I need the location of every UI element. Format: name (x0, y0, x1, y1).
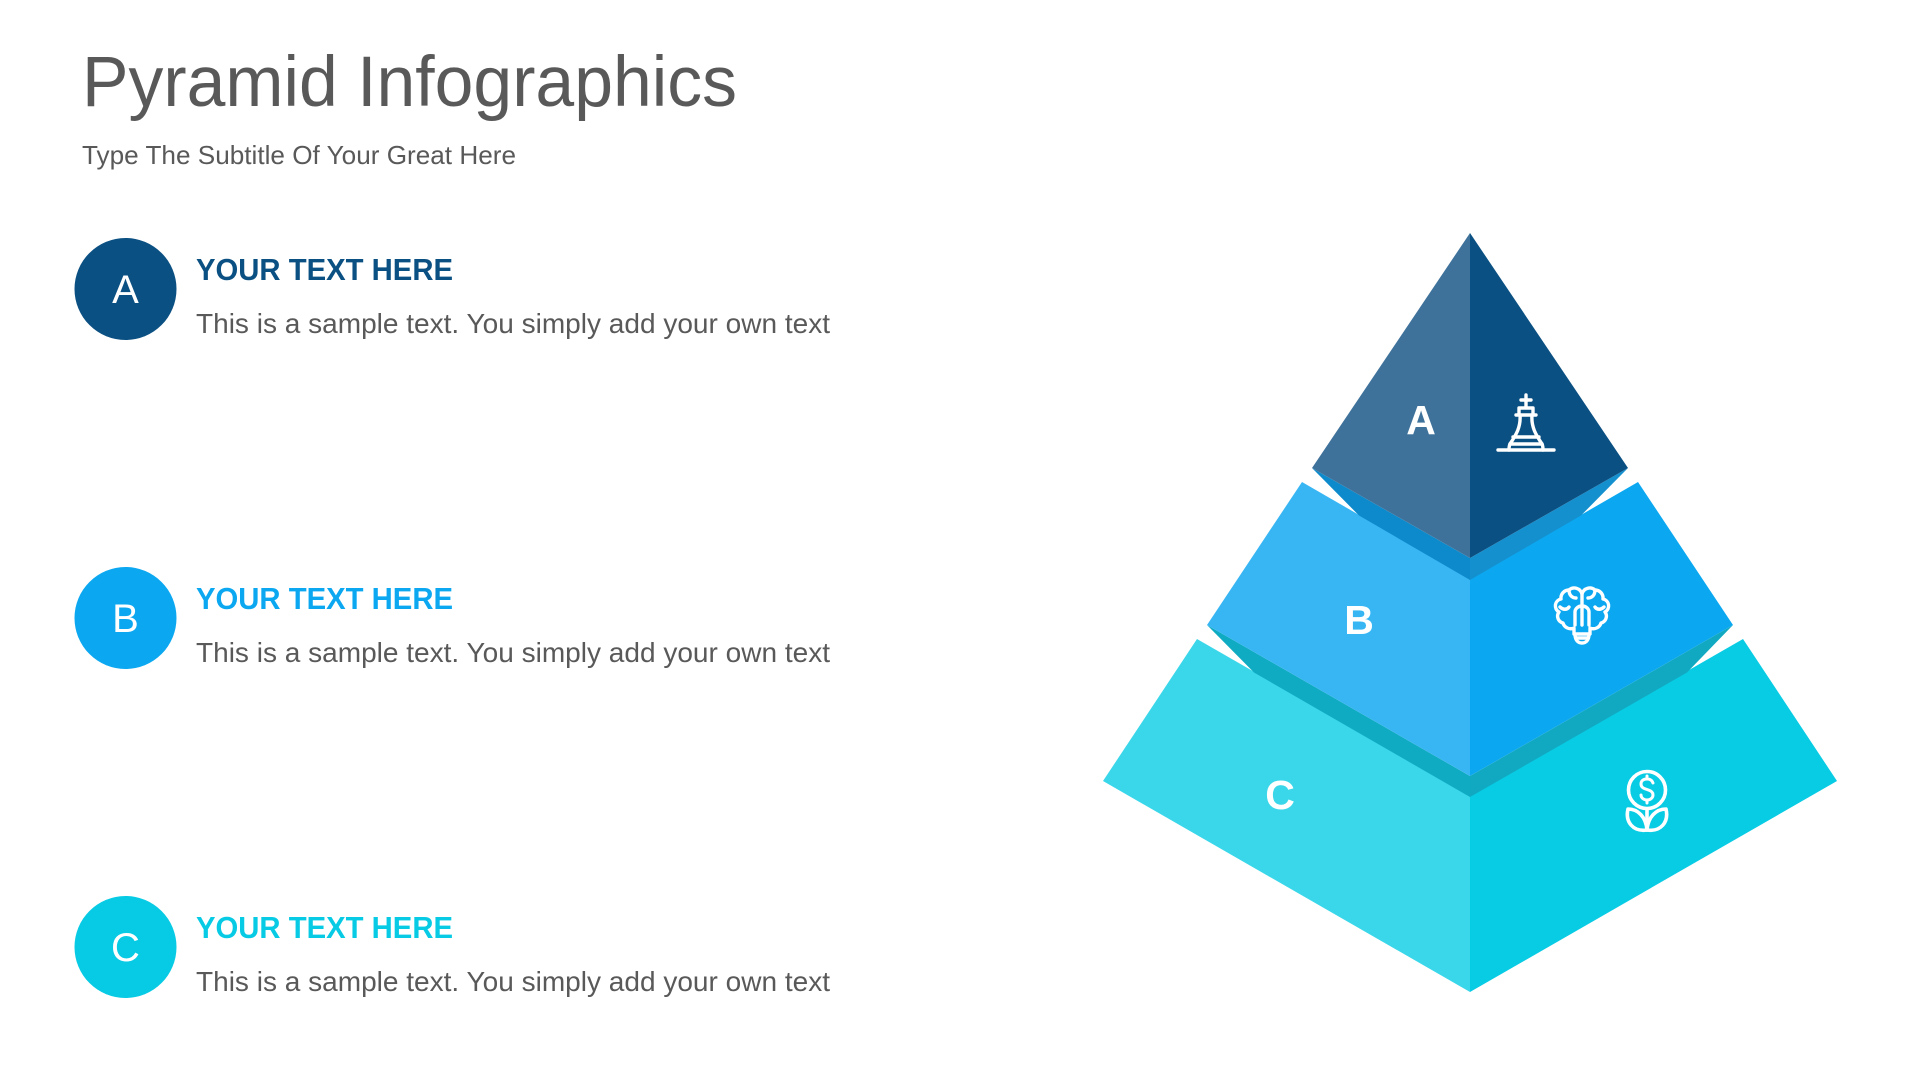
badge A (74, 238, 176, 340)
pyramid (1103, 233, 1837, 992)
badge C: C (111, 926, 140, 970)
label C: C (1265, 772, 1295, 818)
body text C: This is a sample text. You simply add your own text (196, 966, 830, 997)
list item C (74, 896, 830, 998)
shadow under tier B (1207, 625, 1733, 797)
title: Pyramid Infographics (82, 43, 737, 122)
badge B (74, 567, 176, 669)
badge C (74, 896, 176, 998)
badge A: A (112, 268, 139, 312)
tier C (1103, 639, 1837, 992)
badge B: B (112, 597, 139, 641)
subtitle: Type The Subtitle Of Your Great Here (82, 140, 516, 170)
body text B: This is a sample text. You simply add your own text (196, 637, 830, 668)
label A: A (1406, 397, 1436, 443)
body text A: This is a sample text. You simply add your own text (196, 308, 830, 339)
icon: brain bulb (1555, 588, 1609, 643)
heading A: YOUR TEXT HERE (196, 252, 453, 287)
icon: money flower (1627, 772, 1667, 830)
heading B: YOUR TEXT HERE (196, 581, 453, 616)
list item B (74, 567, 830, 669)
shadow under tier A (1312, 468, 1628, 580)
label B: B (1344, 597, 1374, 643)
heading C: YOUR TEXT HERE (196, 910, 453, 945)
tier B (1207, 482, 1733, 776)
list item A (74, 238, 830, 340)
icon: chess king (1498, 395, 1554, 450)
tier A (1312, 233, 1628, 558)
